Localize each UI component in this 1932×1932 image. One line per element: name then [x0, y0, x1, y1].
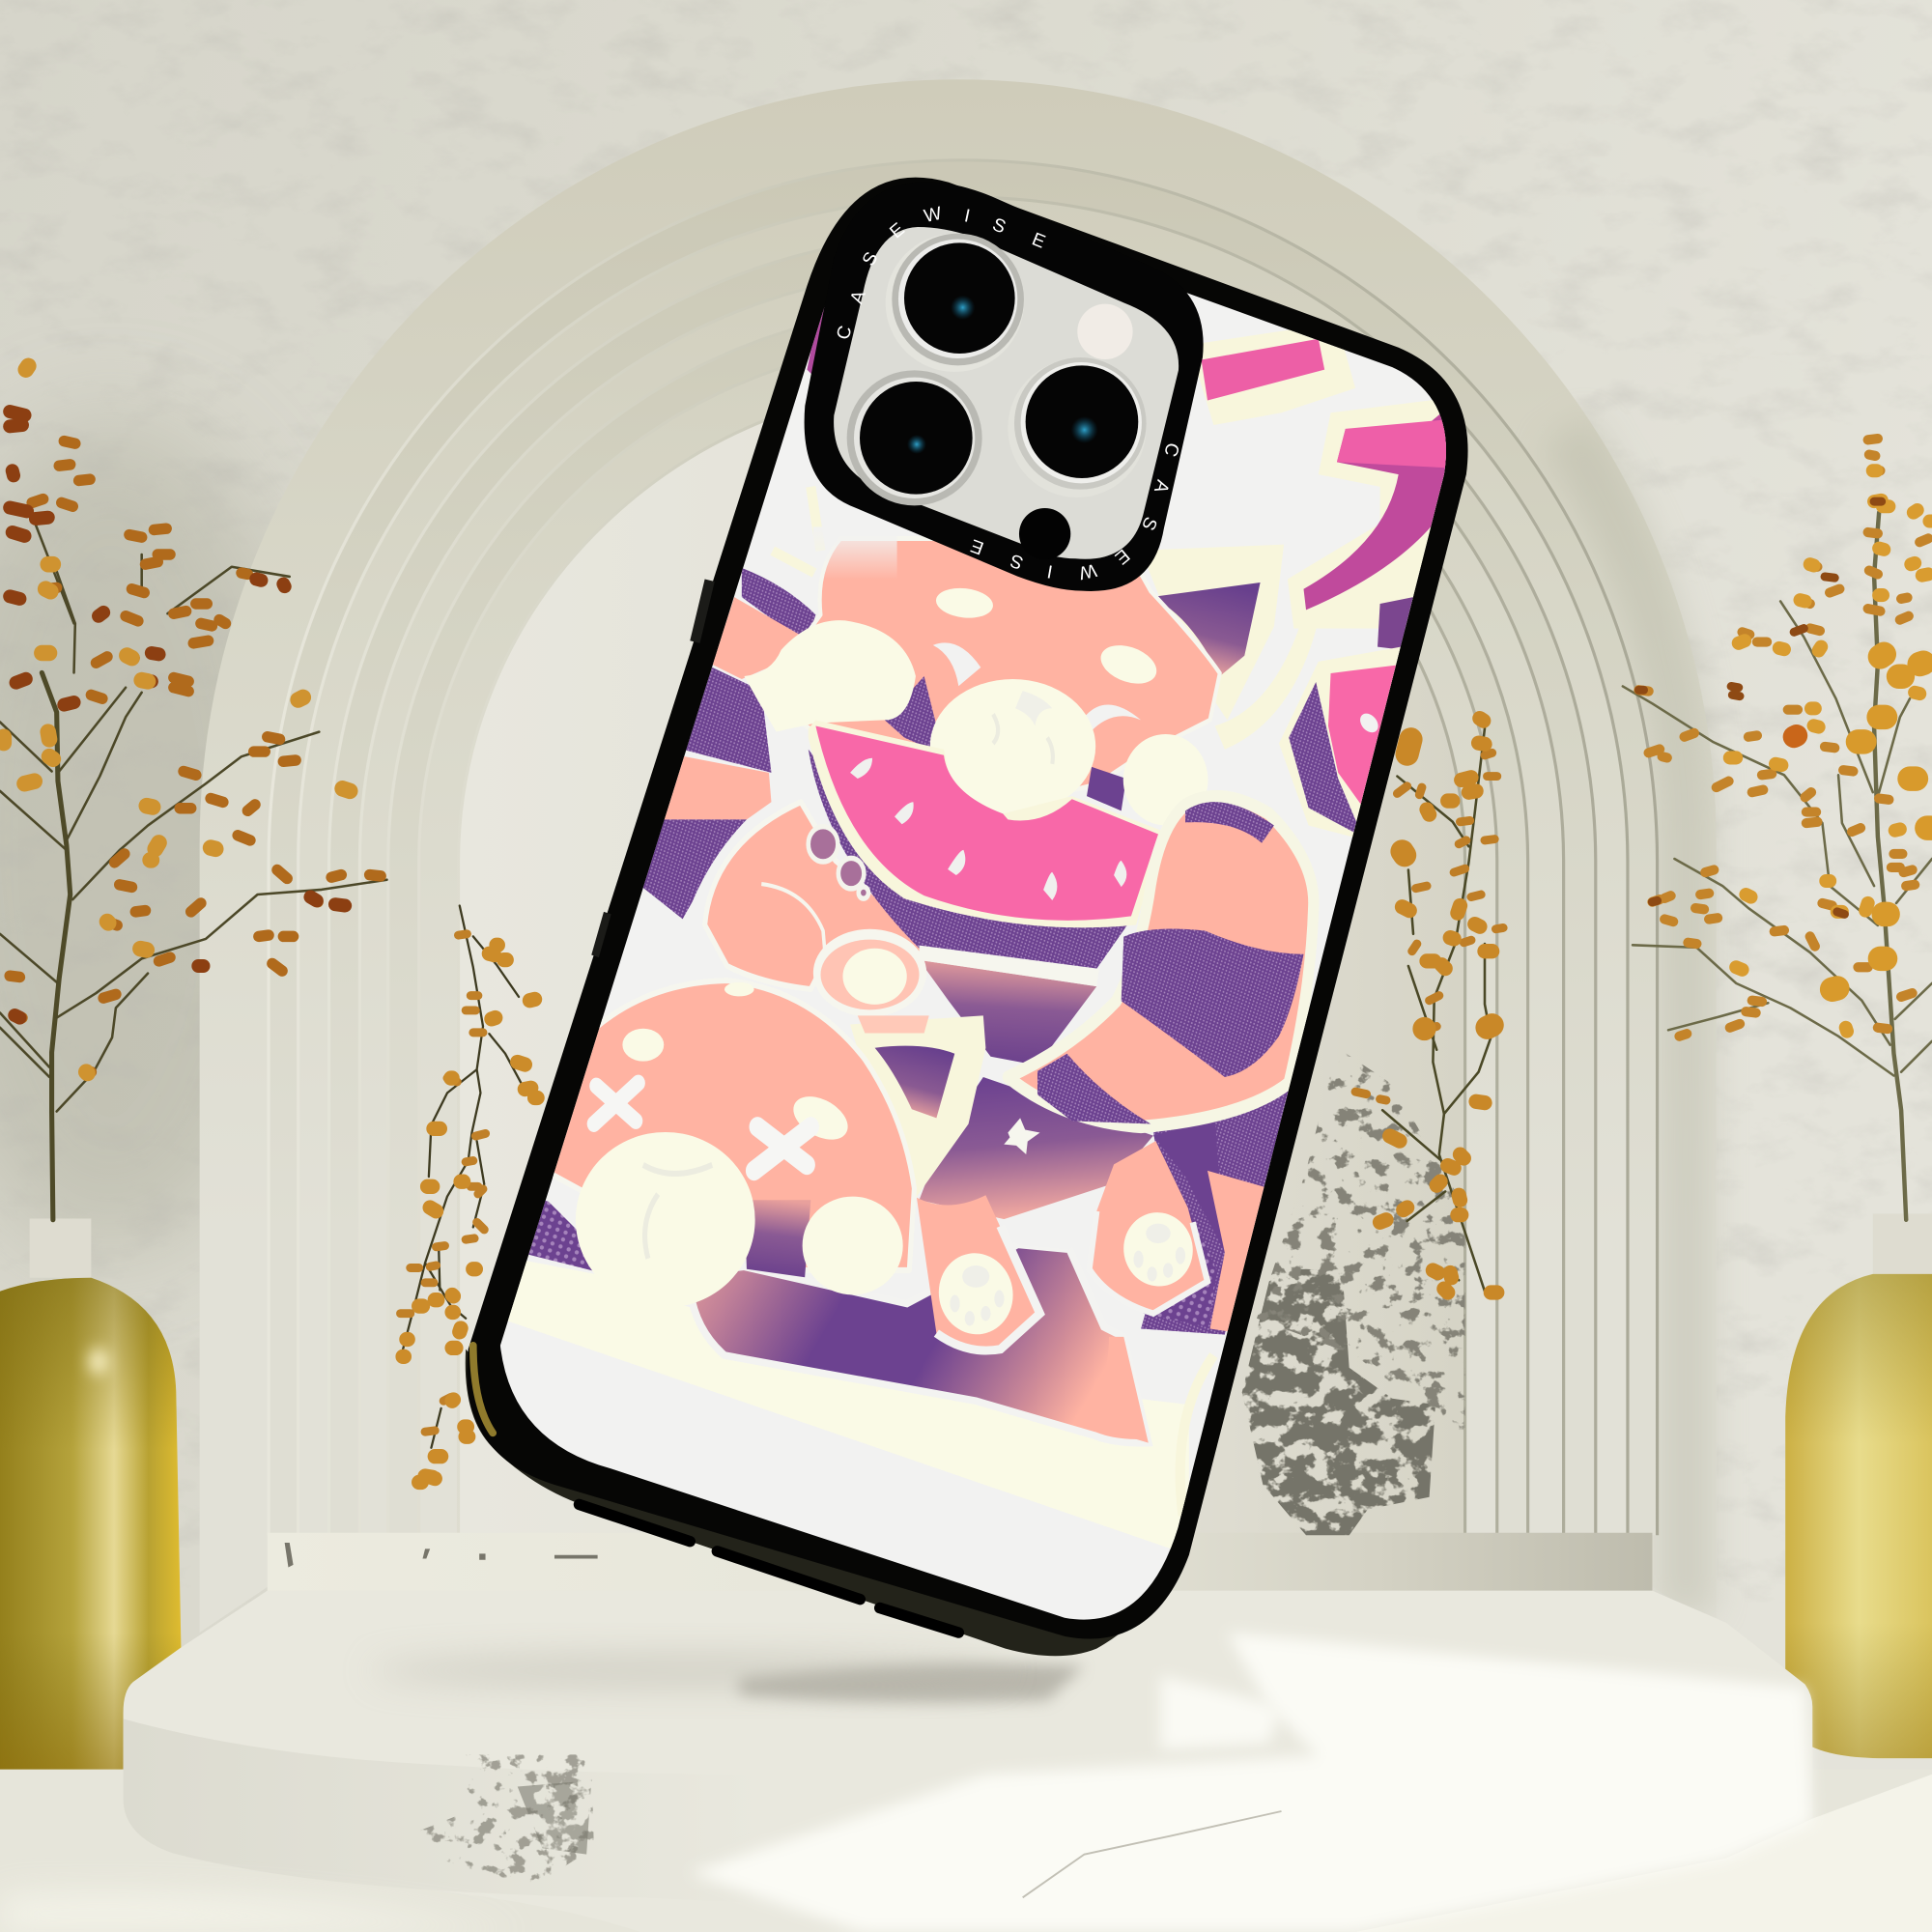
- case brand text: I: [962, 206, 972, 227]
- lower tail: [690, 1244, 1149, 1443]
- case brand text: W: [1077, 559, 1098, 582]
- side buttons: [591, 579, 715, 957]
- case brand text: A: [1150, 477, 1173, 496]
- stepped arch niche: [200, 79, 1717, 1633]
- cream curve lower right: [1180, 1355, 1213, 1516]
- upper cat: right striped tail: [1008, 797, 1314, 1126]
- right watermelon: [1279, 647, 1401, 837]
- case brand text: A: [847, 288, 870, 306]
- camera bump: [805, 182, 1204, 591]
- case brand text: W: [923, 204, 944, 227]
- cream outline near camera: [773, 487, 820, 573]
- charm: [809, 827, 868, 898]
- muzzle: [930, 679, 1095, 813]
- case brand text: C: [833, 324, 857, 342]
- lower cat: head: [535, 980, 914, 1308]
- lower cat: rear leg: [1090, 1141, 1208, 1314]
- lower cat: ear: [850, 1015, 985, 1200]
- upper cat: ear: [1141, 545, 1284, 720]
- center left branch: [401, 906, 537, 1482]
- lower cat: front leg: [917, 1195, 1040, 1350]
- upper cat: head: [744, 526, 1220, 825]
- right vase: [1785, 1213, 1932, 1758]
- left tree: [0, 366, 387, 1220]
- lower cat: body: [920, 1077, 1153, 1223]
- case brand text: S: [1137, 513, 1160, 533]
- case brand text: E: [1029, 229, 1048, 253]
- case side thickness: [466, 1350, 1189, 1656]
- case brand text: I: [1045, 560, 1054, 582]
- left striped tail: [639, 568, 815, 919]
- big watermelon: [809, 720, 1163, 986]
- branch: top right: [1198, 330, 1446, 649]
- case brand text: S: [989, 214, 1009, 238]
- right paw: [1123, 734, 1208, 825]
- case brand text: S: [859, 249, 883, 270]
- left vase: [0, 1218, 182, 1771]
- lens: right: [1008, 357, 1147, 497]
- phone case: [466, 178, 1468, 1656]
- marble shadow on arch: [1242, 1047, 1465, 1535]
- lens: bottom left: [847, 370, 982, 505]
- center right branch: [1355, 719, 1503, 1293]
- case brand text: E: [886, 219, 909, 242]
- X mark: [754, 1126, 810, 1171]
- case brand text: E: [968, 534, 986, 558]
- lens: top left: [886, 234, 1024, 372]
- case brand text: S: [1008, 550, 1026, 573]
- cream bottom band: [493, 1254, 1189, 1555]
- raised paw: [813, 929, 926, 1017]
- rind band: [809, 750, 1133, 969]
- under-chin shadow: [744, 1200, 810, 1277]
- case brand text: C: [1159, 440, 1182, 459]
- case body: [467, 178, 1468, 1639]
- muzzle: [576, 1132, 755, 1308]
- lower cat: purple behind rear leg: [1144, 1208, 1217, 1327]
- flash: [1077, 304, 1133, 359]
- case brand text: E: [1111, 545, 1133, 568]
- right tree: [1623, 439, 1932, 1220]
- X mark left: [594, 1083, 639, 1123]
- white gap between legs: [991, 1182, 1115, 1249]
- lower cat: purple fur behind: [1141, 1089, 1292, 1335]
- paw: [803, 1197, 903, 1294]
- case bottom ports: [579, 1504, 958, 1633]
- traced cat artwork, top layers: [535, 526, 1314, 1308]
- small top left pink strip: [838, 203, 894, 296]
- traced cat artwork, upper layers: [639, 568, 1417, 1335]
- printed artwork: [500, 293, 1446, 1620]
- upper cat: body: [705, 802, 1096, 1065]
- white collar line: [920, 946, 1099, 986]
- cream halo shapes: [1215, 628, 1316, 750]
- lower-left purple fur: [518, 1198, 596, 1271]
- podium: [0, 1591, 1932, 1932]
- gold reflection on case corner: [473, 1346, 493, 1433]
- case brand text: [833, 204, 1182, 582]
- lidar hole: [1019, 508, 1070, 559]
- left paw: [744, 620, 916, 732]
